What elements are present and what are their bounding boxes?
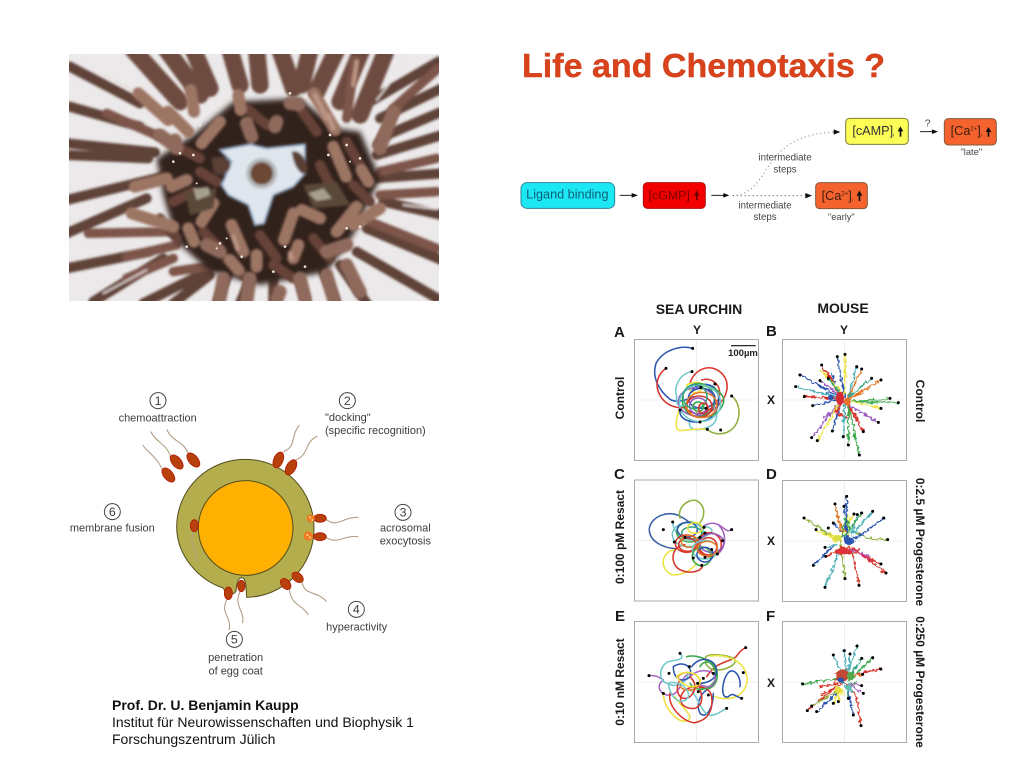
credit text: Forschungszentrum Jülich [112, 731, 275, 747]
panel letters and axis labels: A [614, 324, 625, 341]
dark central body [157, 98, 380, 285]
credit text: Institut für Neurowissenschaften und Biophysik 1 [112, 714, 414, 730]
pathway labels: steps [773, 164, 797, 175]
condition labels, rotated [613, 377, 927, 748]
condition labels, rotated: 0:100 pM Resact [613, 490, 627, 584]
stage labels: membrane fusion [70, 523, 155, 535]
credit text: Prof. Dr. U. Benjamin Kaupp [112, 697, 299, 713]
chart column headings: MOUSE [817, 300, 869, 316]
box: calcium early: ] [848, 189, 852, 203]
egg coat [177, 459, 314, 597]
panel letters and axis labels: C [614, 466, 625, 483]
scale bar: 100µm [728, 348, 758, 359]
box: cGMP [643, 183, 705, 208]
box: calcium late: 2+ [970, 126, 978, 132]
stage labels [70, 412, 431, 677]
sperm heads [159, 451, 326, 600]
pathway labels: steps [753, 212, 777, 223]
pathway labels: "late" [960, 147, 982, 157]
pathway labels: ? [925, 119, 931, 130]
sperm tails [143, 425, 358, 630]
stage labels: (specific recognition) [325, 425, 426, 437]
box: cAMP: i [893, 133, 894, 138]
panel C: sea urchin 100 pM resact tracks [634, 480, 758, 601]
stage numbers: 5 [231, 633, 238, 647]
box: calcium late: i [981, 133, 982, 138]
chart column headings [656, 300, 869, 317]
arrows [620, 132, 933, 196]
panel letters and axis labels: X [767, 534, 775, 548]
box: ligand binding [521, 183, 615, 208]
pathway labels: "early" [828, 212, 855, 222]
panel D: mouse 2.5 uM progesterone tracks [782, 480, 906, 602]
diagram: egg and sperm stages [70, 393, 431, 677]
stage labels: of egg coat [208, 665, 263, 677]
box: calcium early: 2+ [841, 191, 849, 197]
stage labels: exocytosis [380, 535, 431, 547]
box: calcium late [944, 119, 996, 145]
stage numbers: 6 [109, 505, 116, 519]
stage numbers: 4 [353, 603, 360, 617]
box: calcium late: [Ca [951, 124, 970, 138]
panel letters and axis labels: B [766, 323, 777, 340]
box: calcium early [816, 183, 867, 209]
stage labels: chemoattraction [119, 413, 197, 425]
panel F: mouse 250 uM progesterone tracks [782, 622, 906, 742]
flow diagram: signalling pathway [521, 118, 996, 223]
stage numbers [104, 393, 411, 647]
box: cGMP: [cGMP] [649, 189, 690, 203]
stage labels: "docking" [325, 412, 371, 424]
stage labels: acrosomal [380, 523, 431, 535]
stage labels: penetration [208, 652, 263, 664]
condition labels, rotated: 0:10 nM Resact [613, 638, 627, 726]
box: calcium early: i [852, 198, 853, 203]
pathway labels: intermediate [758, 153, 812, 164]
credit text [112, 697, 414, 747]
box: cAMP: [cAMP] [852, 124, 893, 138]
panel letters and axis labels: Y [840, 323, 848, 337]
panel B: mouse control tracks [782, 340, 906, 460]
pathway labels: intermediate [738, 200, 792, 211]
panel E: sea urchin 10 nM resact tracks [634, 622, 758, 742]
chart column headings: SEA URCHIN [656, 301, 742, 317]
stage numbers: 3 [400, 506, 407, 520]
photo: sea urchin close-up [67, 50, 442, 303]
panel A: sea urchin control tracks [634, 340, 758, 460]
arrowheads [632, 129, 938, 198]
panel letters and axis labels: X [767, 676, 775, 690]
condition labels, rotated: Control [613, 377, 627, 419]
box: cAMP [846, 118, 908, 144]
panel letters and axis labels: Y [693, 323, 701, 337]
box: calcium late: ] [977, 124, 981, 138]
box: ligand binding: Ligand binding [526, 188, 609, 202]
panel letters and axis labels [614, 323, 848, 690]
stage labels: hyperactivity [326, 622, 388, 634]
panel letters and axis labels: F [766, 608, 775, 625]
title: Life and Chemotaxis ? [522, 47, 885, 84]
white central tissue [220, 144, 305, 225]
acrosomal granules [304, 514, 315, 541]
pathway labels [738, 119, 982, 223]
panel letters and axis labels: E [615, 608, 625, 625]
condition labels, rotated: Control [913, 380, 927, 422]
stage numbers: 1 [155, 394, 162, 408]
panel letters and axis labels: X [767, 393, 775, 407]
panel letters and axis labels: D [766, 466, 777, 483]
condition labels, rotated: 0:2.5 µM Progesterone [913, 478, 927, 606]
box: calcium early: [Ca [822, 189, 841, 203]
stage numbers: 2 [344, 394, 351, 408]
condition labels, rotated: 0:250 µM Progesterone [913, 616, 927, 748]
